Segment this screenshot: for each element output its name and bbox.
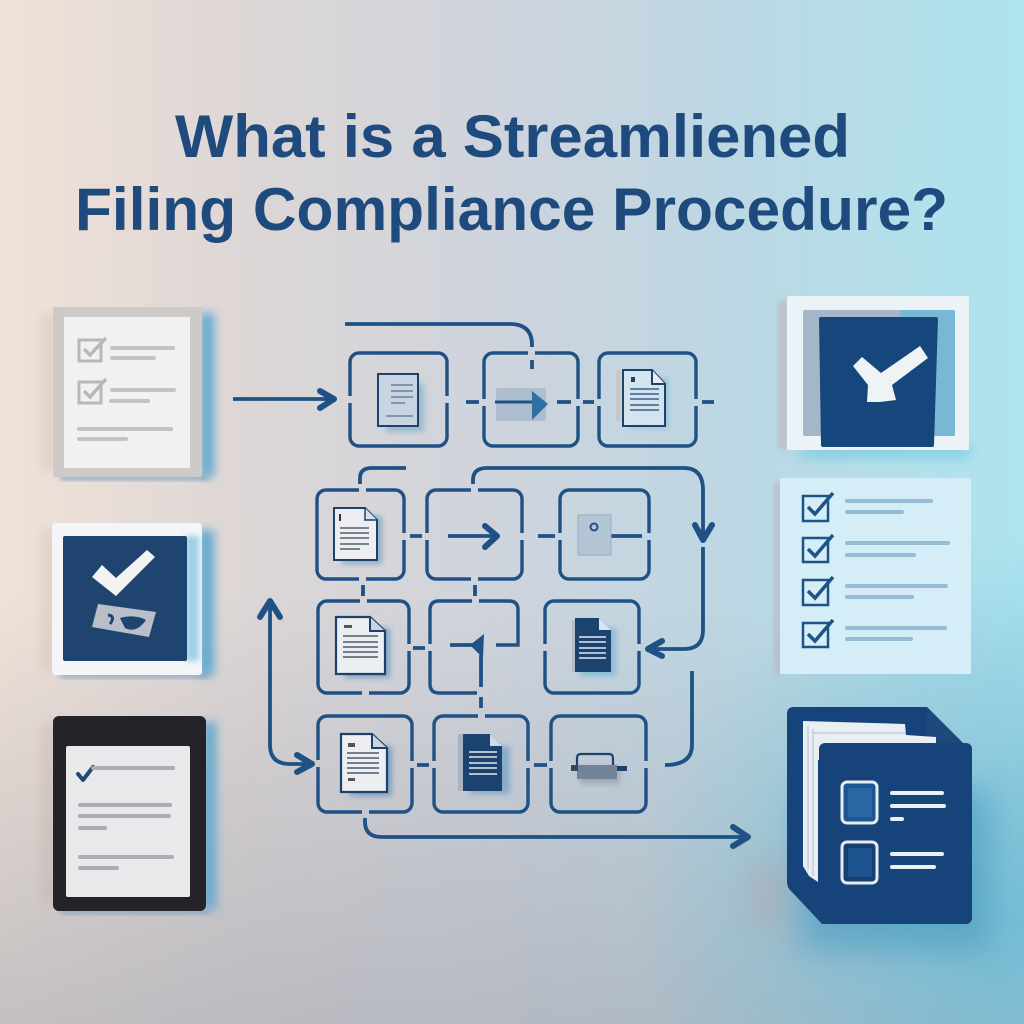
icon: document row 2 box 1 bbox=[334, 508, 382, 564]
icon: document row 4 box 1 bbox=[341, 734, 392, 796]
icon: stapler row 4 box 3 bbox=[571, 754, 627, 784]
panel: left tablet bbox=[42, 716, 216, 914]
folder side shadow bbox=[750, 860, 790, 930]
title: What is a Streamliened bbox=[175, 103, 850, 170]
panel: left checklist card bbox=[42, 307, 214, 480]
icon: large check mark bbox=[853, 346, 928, 402]
folder papers bbox=[803, 721, 936, 882]
icon: check boxes bbox=[79, 338, 106, 403]
icon: document row 1 box 3 bbox=[616, 370, 668, 428]
icon: badge bbox=[92, 604, 156, 637]
icon: navy document row 4 box 2 bbox=[458, 734, 510, 794]
title: Filing Compliance Procedure? bbox=[75, 176, 948, 243]
folder text lines bbox=[892, 793, 944, 867]
flow box outlines bbox=[317, 353, 696, 812]
icon: tablet check bbox=[78, 767, 93, 780]
icon: navy document row 3 box 3 bbox=[572, 618, 616, 676]
folder check icons bbox=[842, 782, 877, 883]
icon: check mark bbox=[92, 550, 155, 596]
text lines bbox=[847, 501, 948, 639]
triangular arrowheads bbox=[470, 634, 484, 658]
panel: left navy check card bbox=[42, 523, 214, 678]
text lines bbox=[79, 348, 174, 439]
icon: document row 3 box 1 bbox=[336, 617, 390, 678]
panel: right checklist bbox=[774, 478, 971, 674]
title bbox=[75, 103, 948, 243]
icon: arrow card row 1 box 2 bbox=[495, 388, 548, 421]
text lines bbox=[80, 768, 173, 868]
flow chart bbox=[233, 324, 748, 846]
checklist rows bbox=[803, 493, 833, 647]
icon: note card row 2 box 3 bbox=[578, 515, 611, 555]
panel: right approval card bbox=[778, 296, 970, 457]
icon: document row 1 box 1 bbox=[378, 374, 424, 432]
panel: right folder bbox=[787, 707, 990, 950]
connector arrows and dashes bbox=[233, 324, 748, 846]
